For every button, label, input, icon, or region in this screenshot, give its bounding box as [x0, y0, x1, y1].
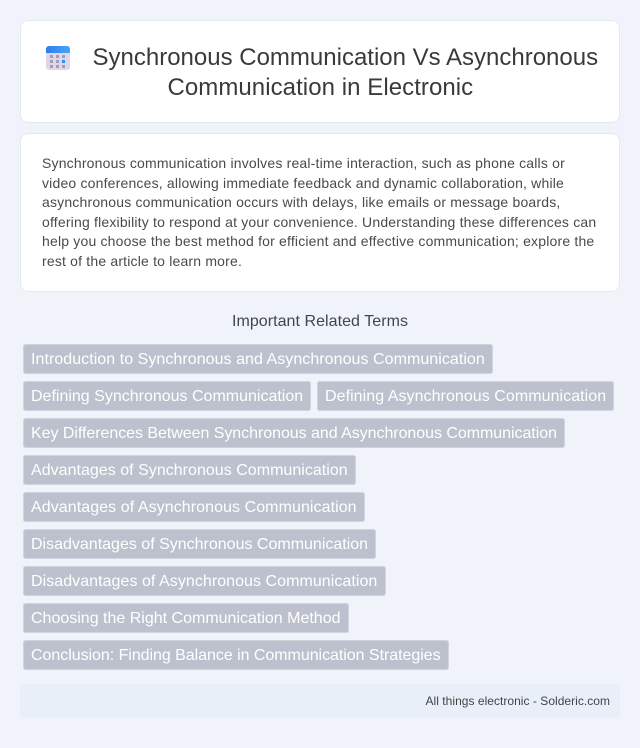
term — [23, 492, 365, 522]
header card — [20, 20, 620, 123]
term: Introduction to Synchronous and Asynchronous Communication — [31, 351, 485, 368]
term — [23, 529, 376, 559]
term: Defining Asynchronous Communication — [325, 388, 606, 405]
term: Advantages of Asynchronous Communication — [31, 499, 357, 516]
intro text: video conferences, allowing immediate feedback and dynamic collaboration, while — [42, 175, 564, 191]
term: Conclusion: Finding Balance in Communication Strategies — [31, 647, 441, 664]
term: Choosing the Right Communication Method — [31, 610, 340, 627]
intro text: rest of the article to learn more. — [42, 253, 242, 269]
term — [23, 455, 356, 485]
term: Defining Synchronous Communication — [31, 388, 303, 405]
term — [23, 640, 449, 670]
intro text: offering flexibility to respond at your convenience. Understanding these differences can — [42, 214, 596, 230]
intro text: asynchronous communication occurs with delays, like emails or message boards, — [42, 194, 560, 210]
term — [23, 566, 386, 596]
term — [23, 381, 311, 411]
intro text: help you choose the best method for efficient and effective communication; explore the — [42, 233, 594, 249]
footer — [20, 684, 620, 718]
title — [92, 44, 598, 101]
term: Disadvantages of Synchronous Communication — [31, 536, 368, 553]
intro text: Synchronous communication involves real-time interaction, such as phone calls or — [42, 155, 565, 171]
term — [317, 381, 614, 411]
section heading: Important Related Terms — [232, 313, 408, 330]
icon: calendar — [46, 46, 70, 70]
footer: All things electronic - Solderic.com — [426, 694, 610, 708]
title: Synchronous Communication Vs Asynchronous — [92, 44, 598, 71]
term: Disadvantages of Asynchronous Communication — [31, 573, 377, 590]
term — [23, 418, 565, 448]
title: Communication in Electronic — [168, 74, 473, 101]
term — [23, 344, 493, 374]
term: Key Differences Between Synchronous and Asynchronous Communication — [31, 425, 557, 442]
term — [23, 603, 349, 633]
term: Advantages of Synchronous Communication — [31, 462, 348, 479]
intro card — [20, 133, 620, 292]
intro text — [42, 155, 596, 269]
